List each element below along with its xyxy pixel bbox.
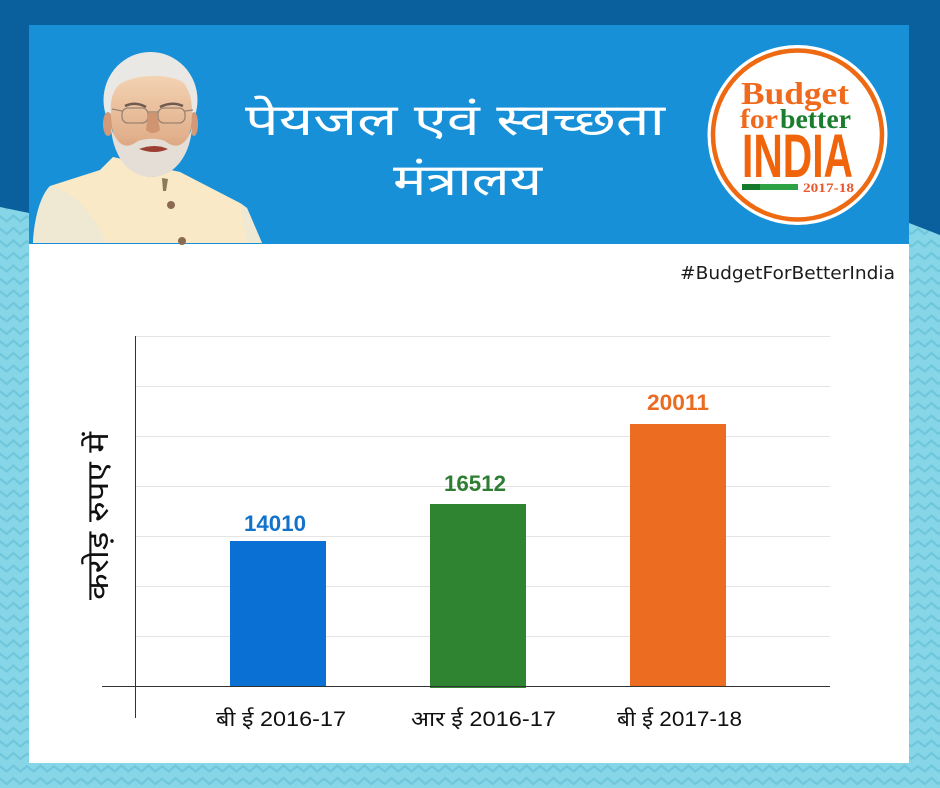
panel: blue header bbox=[29, 25, 909, 244]
badge: Budget for better India: for bbox=[740, 104, 778, 134]
chart axes bbox=[102, 336, 830, 718]
hashtag: #BudgetForBetterIndia bbox=[680, 263, 895, 284]
x label: BE 2017-18: बी ई 2017-18 bbox=[617, 707, 742, 731]
x label: BE 2016-17: बी ई 2016-17 bbox=[216, 707, 346, 731]
title: पेयजल एवं स्वच्छता bbox=[245, 95, 667, 145]
value label: 14010: 14010 bbox=[244, 511, 306, 536]
portrait: man in cream vest bbox=[33, 52, 262, 245]
title bbox=[245, 95, 667, 205]
value label: 20011: 20011 bbox=[647, 390, 709, 415]
panel: white chart card bbox=[29, 244, 909, 763]
badge: Budget for better India: Budget bbox=[741, 75, 849, 111]
badge: Budget for better India: 2017-18 bbox=[803, 181, 854, 195]
title: मंत्रालय bbox=[393, 156, 544, 205]
bar: BE 2017-18 bbox=[630, 424, 726, 687]
badge: Budget for better India: INDIA bbox=[742, 122, 853, 190]
bar: BE 2016-17 bbox=[230, 541, 326, 687]
bar chart bbox=[81, 336, 830, 731]
badge: Budget for better India: better bbox=[780, 104, 851, 134]
background: dark blue top band bbox=[0, 0, 940, 235]
y axis title: करोड़ रुपए में bbox=[81, 431, 115, 600]
badge: Budget for better India bbox=[708, 45, 888, 225]
bar: RE 2016-17 bbox=[430, 504, 526, 688]
x label: RE 2016-17: आर ई 2016-17 bbox=[411, 707, 556, 731]
value label: 16512: 16512 bbox=[444, 471, 506, 496]
